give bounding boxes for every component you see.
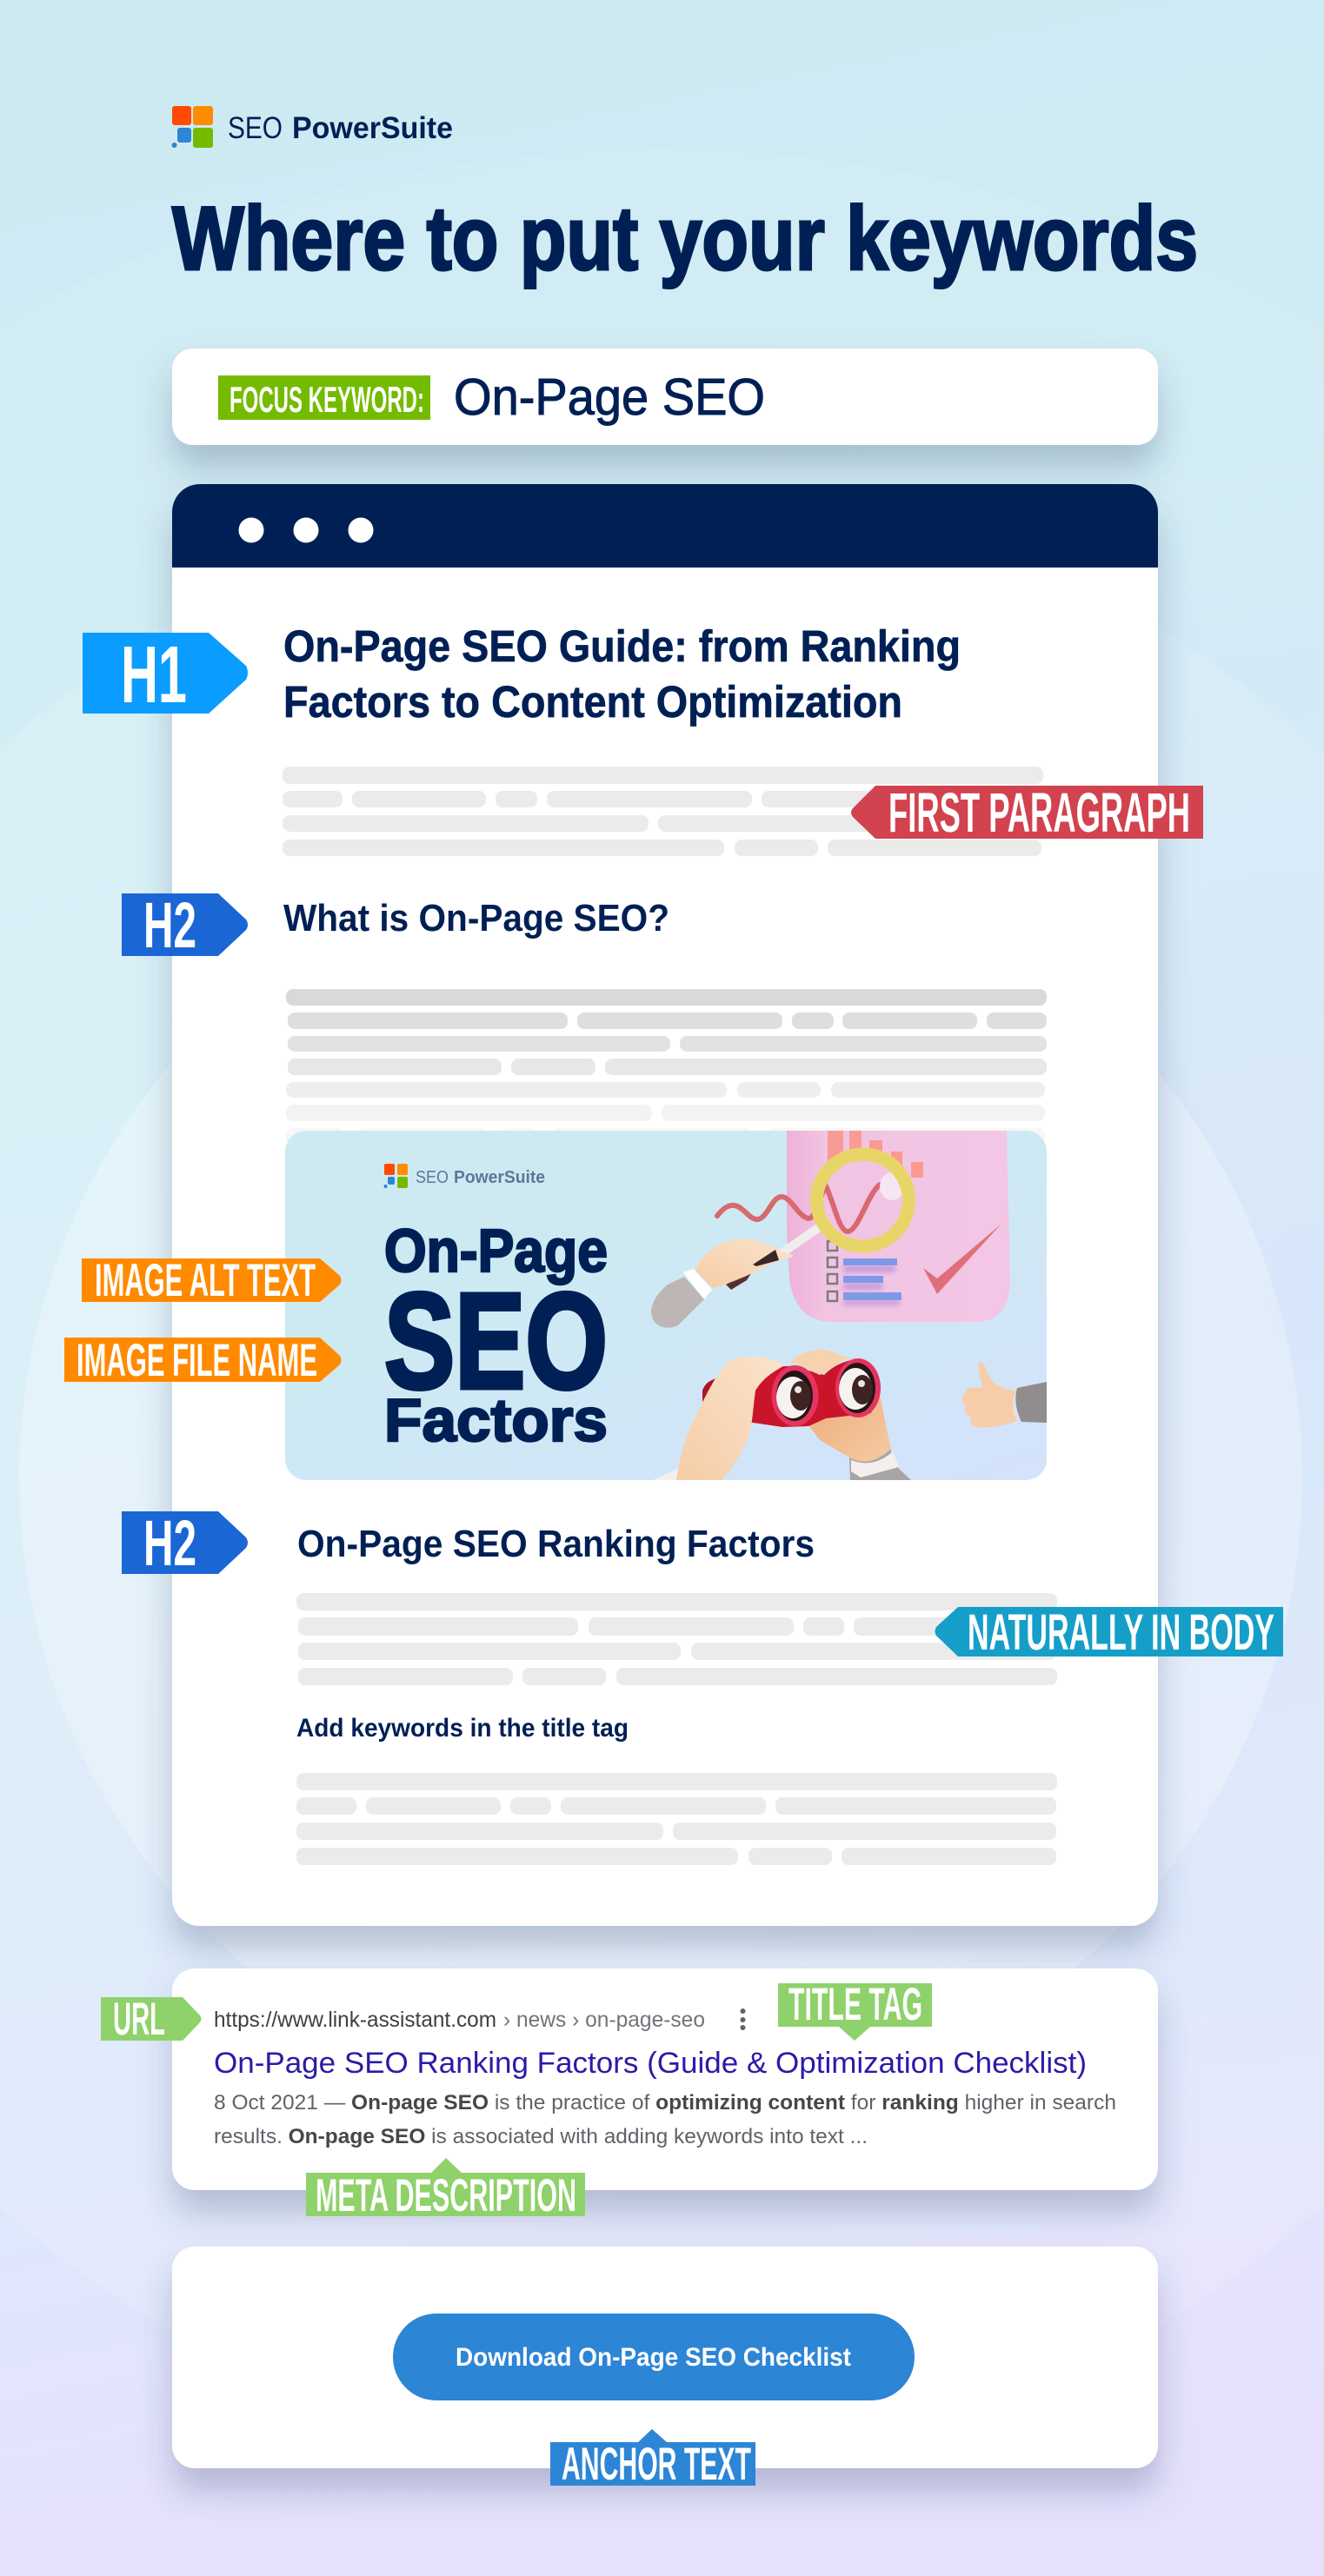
menu dots (741, 2008, 746, 2030)
result description (214, 2091, 1116, 2148)
tag: first paragraph (851, 781, 1203, 844)
H2 heading: what is: What is On-Page SEO? (283, 897, 669, 939)
result description: results. On-page SEO is associated with adding keywords into text ... (214, 2125, 868, 2148)
tag: URL: URL (113, 1994, 165, 2045)
download button (393, 2314, 915, 2400)
panel: search result (172, 1969, 1158, 2190)
result URL: https://www.link-assistant.com (214, 2008, 496, 2032)
thumbs up hand (962, 1361, 1047, 1428)
panel: browser window (172, 484, 1158, 1926)
second paragraph placeholder lines (286, 989, 1047, 1145)
tag: meta description: META DESCRIPTION (316, 2170, 576, 2221)
tag: H2 what is (122, 889, 248, 961)
third paragraph placeholder lines (296, 1593, 1057, 1685)
image headline (384, 1217, 608, 1454)
tag: H2 what is: H2 (143, 889, 196, 961)
subheading: add keywords: Add keywords in the title tag (296, 1714, 629, 1743)
H1 heading: On-Page SEO Guide: from Ranking (283, 621, 961, 671)
logo: SEO PowerSuite: SEO (228, 111, 283, 145)
fourth paragraph placeholder lines (296, 1773, 1057, 1865)
tag: H1: H1 (121, 629, 187, 720)
check mark (923, 1225, 1001, 1294)
panel: call to action (172, 2247, 1158, 2468)
image headline: Factors (384, 1386, 608, 1454)
bar chart on board (828, 1131, 923, 1178)
tag: image alt text (82, 1255, 341, 1306)
H1 heading: Factors to Content Optimization (283, 677, 902, 727)
H1 heading (283, 621, 961, 727)
focus keyword value: On-Page SEO (454, 368, 765, 426)
tag: H2 ranking factors: H2 (143, 1507, 196, 1579)
hands holding binoculars (653, 1350, 911, 1480)
H2 heading: ranking factors: On-Page SEO Ranking Factors (297, 1523, 815, 1565)
result description: 8 Oct 2021 — On-page SEO is the practice of optimizing content for ranking higher in search (214, 2091, 1116, 2115)
tag: anchor text: ANCHOR TEXT (562, 2439, 751, 2490)
focus keyword tag (218, 375, 430, 420)
illustration: checklist board with magnifier and hands (651, 1131, 1047, 1480)
checklist (828, 1241, 837, 1301)
image logo: PowerSuite (454, 1168, 545, 1187)
tag: title tag (778, 1979, 932, 2041)
browser header bar (172, 484, 1158, 568)
download button: Download On-Page SEO Checklist (456, 2343, 851, 2372)
first paragraph placeholder lines (283, 767, 1043, 856)
focus keyword tag: FOCUS KEYWORD: (230, 379, 424, 420)
result URL: › news › on-page-seo (503, 2008, 705, 2032)
chart wave (717, 1185, 880, 1232)
tag: image alt text: IMAGE ALT TEXT (95, 1255, 316, 1306)
panel: focus keyword (172, 349, 1158, 445)
logo: SEO PowerSuite: PowerSuite (292, 111, 453, 145)
tag: anchor text (550, 2429, 755, 2490)
article image (285, 1131, 1047, 1480)
image logo: SEO (416, 1168, 449, 1187)
tag: H1 (83, 629, 248, 720)
tag: image file name: IMAGE FILE NAME (77, 1335, 317, 1386)
tag: image file name (64, 1335, 341, 1386)
tag: meta description (306, 2158, 585, 2221)
logo: SEO PowerSuite (172, 106, 453, 148)
hand holding magnifier (651, 1238, 793, 1328)
tag: title tag: TITLE TAG (788, 1979, 922, 2030)
tag: H2 ranking factors (122, 1507, 248, 1579)
result URL (214, 2008, 705, 2032)
pink board (787, 1131, 1010, 1322)
image logo (384, 1164, 545, 1188)
image headline: On-Page (384, 1217, 608, 1285)
magnifier (782, 1154, 909, 1253)
result title: On-Page SEO Ranking Factors (Guide & Optimization Checklist) (214, 2047, 1087, 2080)
image headline: SEO (384, 1265, 608, 1417)
